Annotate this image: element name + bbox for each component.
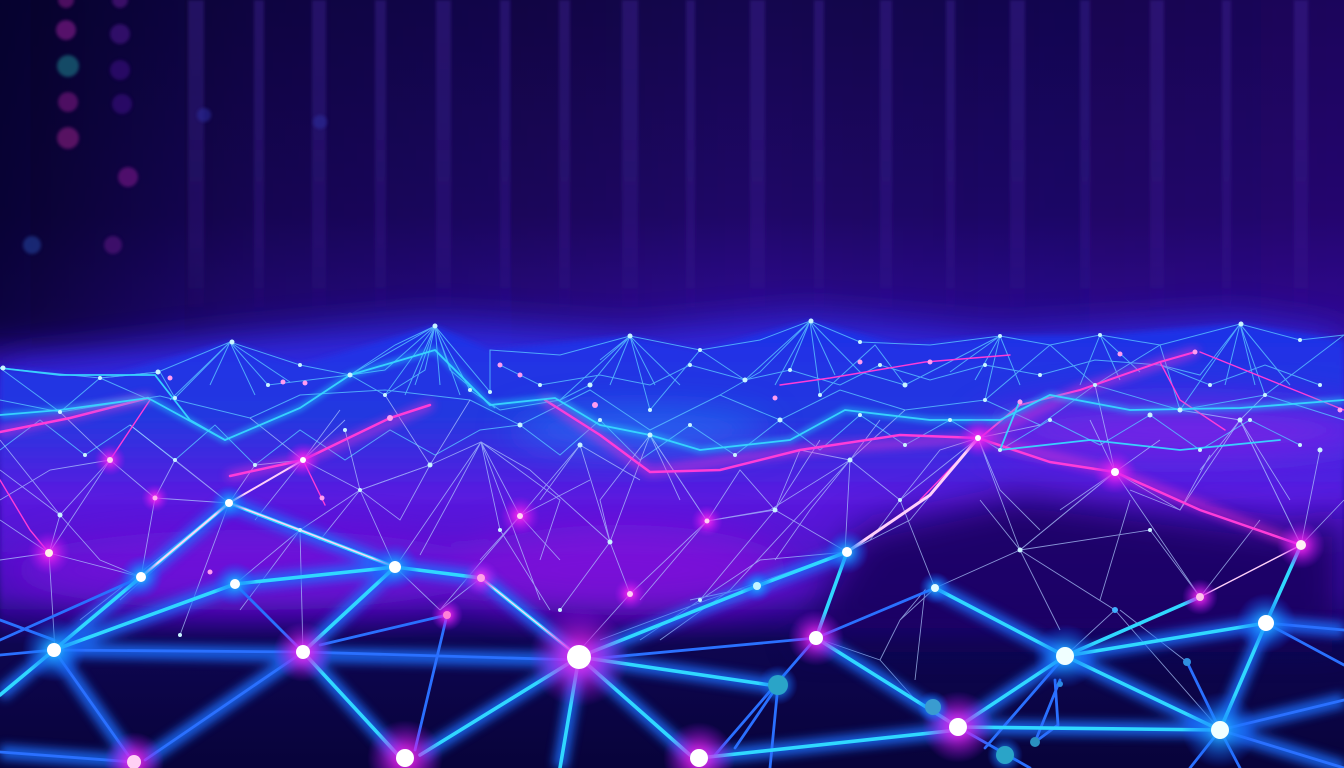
bright white-pink strands (141, 438, 1301, 657)
vertical light stripes (188, 0, 1308, 320)
horizon glow (0, 318, 1344, 470)
thin mesh lines: middle layer (0, 385, 1344, 730)
thin mesh lines: upper ridge (0, 321, 1344, 465)
node glows: cyan (22, 485, 1296, 768)
bright node cores (45, 435, 1306, 768)
foreground lines: blue (0, 567, 1344, 768)
dim background dots (23, 0, 327, 254)
small mesh nodes (0, 318, 1322, 747)
cyan ridge lines (0, 350, 1344, 450)
pink mesh lines (0, 352, 1301, 545)
background side shading (0, 0, 1344, 350)
mesh band fill (0, 321, 1344, 640)
foreground line glow (0, 503, 1344, 768)
magenta haze and dark patches (10, 400, 1344, 640)
node glows: magenta (27, 418, 1325, 768)
small magenta nodes (168, 350, 1342, 574)
foreground lines: bright cyan (0, 503, 1301, 768)
